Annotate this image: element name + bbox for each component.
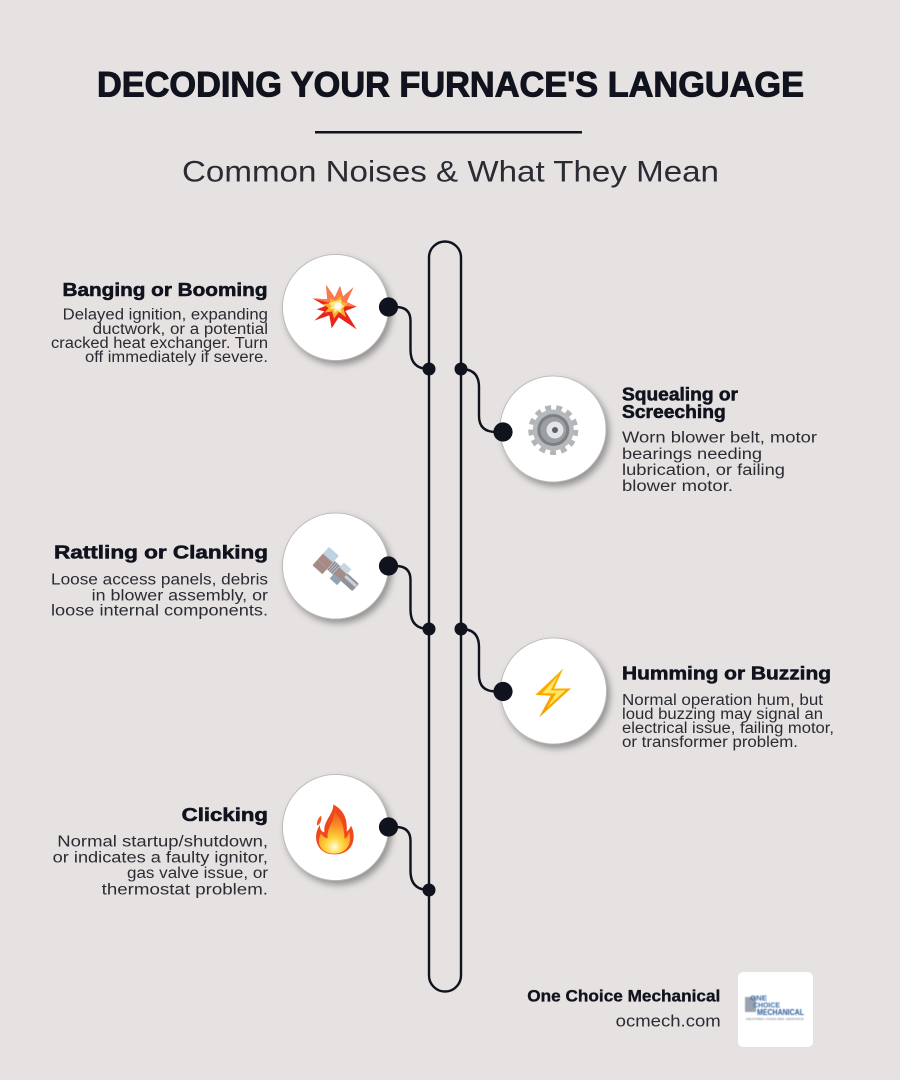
item: banging or booming — [51, 254, 436, 376]
heading: Clicking — [182, 805, 268, 825]
heading: Rattling or Clanking — [54, 542, 268, 562]
footer website: ocmech.com — [616, 1013, 721, 1031]
icon: bolt and nut — [282, 513, 388, 619]
item: squealing or screeching — [454, 362, 817, 495]
big connector dot and path — [379, 556, 436, 636]
big connector dot and path — [379, 297, 436, 376]
item: clicking — [53, 774, 435, 898]
big connector dot and path — [379, 817, 436, 896]
description — [51, 571, 268, 620]
logo — [738, 972, 813, 1047]
icon: explosion — [282, 254, 388, 360]
description — [53, 834, 268, 898]
logo: ONE — [750, 996, 767, 1002]
heading: Squealing or — [622, 385, 738, 405]
item: rattling or clanking — [51, 513, 436, 636]
icon: gear — [500, 376, 606, 482]
description: Delayed ignition, expanding — [63, 306, 268, 324]
description: off immediately if severe. — [85, 349, 268, 366]
description: or transformer problem. — [622, 734, 798, 751]
footer brand name: One Choice Mechanical — [527, 988, 720, 1006]
item: humming or buzzing — [454, 622, 834, 751]
description: bearings needing — [622, 446, 762, 463]
description: blower motor. — [622, 478, 733, 495]
description: loose internal components. — [51, 603, 268, 620]
description: lubrication, or failing — [622, 462, 785, 479]
logo: HEATING COOLING SERVICE — [746, 1017, 804, 1021]
heading: Humming or Buzzing — [622, 664, 831, 684]
description: loud buzzing may signal an — [622, 706, 823, 723]
description: Loose access panels, debris — [51, 571, 268, 588]
big connector dot and path — [454, 362, 513, 442]
description: cracked heat exchanger. Turn — [51, 335, 268, 352]
description — [51, 306, 268, 366]
central timeline track — [429, 242, 461, 992]
heading — [622, 385, 738, 422]
icon: lightning bolt — [500, 638, 606, 744]
icon: fire — [282, 774, 388, 880]
description: ductwork, or a potential — [93, 321, 268, 338]
description: gas valve issue, or — [127, 865, 268, 882]
description: thermostat problem. — [102, 881, 268, 898]
title: DECODING YOUR FURNACE'S LANGUAGE — [97, 66, 804, 104]
description: Normal operation hum, but — [622, 692, 824, 709]
description: or indicates a faulty ignitor, — [53, 850, 268, 867]
description: Worn blower belt, motor — [622, 430, 817, 447]
subtitle: Common Noises & What They Mean — [182, 156, 719, 188]
heading: Banging or Booming — [62, 280, 268, 300]
heading: Screeching — [622, 402, 726, 422]
description: in blower assembly, or — [92, 587, 268, 604]
description: electrical issue, failing motor, — [622, 720, 834, 737]
logo: MECHANICAL — [757, 1008, 804, 1017]
big connector dot and path — [454, 622, 513, 701]
description — [622, 692, 834, 751]
description: Normal startup/shutdown, — [57, 834, 268, 851]
logo: CHOICE — [753, 1002, 780, 1010]
description — [622, 430, 817, 495]
